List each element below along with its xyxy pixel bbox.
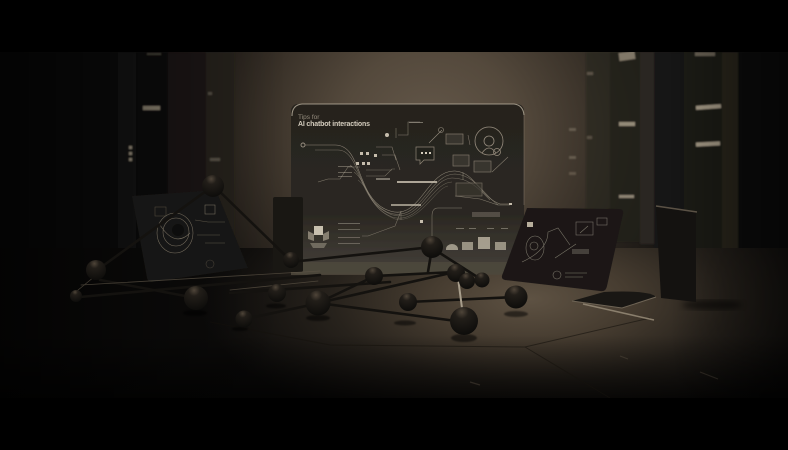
chat bubbles xyxy=(416,134,491,196)
screen title xyxy=(298,114,370,128)
lower-right pale tiles xyxy=(446,237,506,250)
right tablet xyxy=(502,208,623,291)
screen title: Tips for xyxy=(298,114,320,121)
phone and stylus on floor xyxy=(572,292,656,320)
server racks left and right xyxy=(0,51,788,267)
dark box behind left of main screen xyxy=(273,197,303,272)
lower-left cube icon xyxy=(308,226,329,248)
background wall xyxy=(0,52,788,398)
screen title: AI chatbot interactions xyxy=(298,121,370,128)
molecule rods xyxy=(72,186,516,322)
screen nodes and bars xyxy=(338,122,512,244)
vignette xyxy=(0,52,788,398)
standing dark device xyxy=(656,206,742,310)
main screen xyxy=(291,104,524,275)
left tablet xyxy=(132,190,248,282)
molecule shadows xyxy=(183,304,528,342)
user icon ring xyxy=(475,127,503,156)
floor xyxy=(0,248,788,398)
flowing circuit lines xyxy=(301,122,510,240)
molecule spheres xyxy=(70,175,528,335)
